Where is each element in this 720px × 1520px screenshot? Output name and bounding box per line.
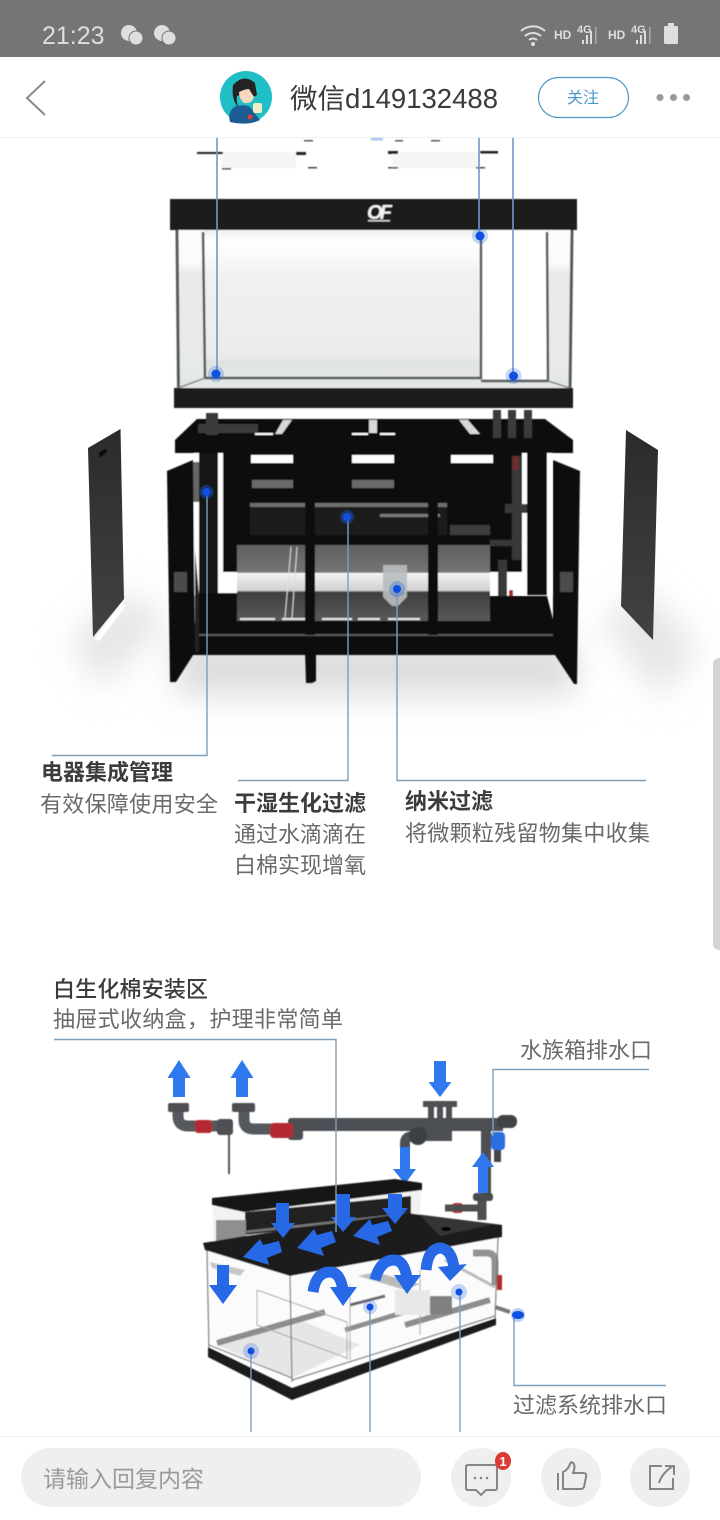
callout lines: upper tank bbox=[208, 138, 522, 384]
callout: white cotton area: 抽屉式收纳盒，护理非常简单 bbox=[53, 1007, 343, 1032]
plumbing on top bbox=[198, 410, 532, 438]
nano filter cup bbox=[383, 565, 407, 606]
floor shadow bbox=[70, 590, 700, 700]
internal pipes bbox=[217, 1296, 490, 1343]
descending pipe bbox=[405, 1127, 486, 1220]
callout: nano filtration: 将微颗粒残留物集中收集 bbox=[405, 821, 650, 846]
base bbox=[208, 1318, 496, 1400]
left side door bbox=[88, 429, 124, 637]
cabinet bbox=[167, 410, 580, 684]
callout: wet dry filtration bbox=[234, 510, 366, 878]
glass body bbox=[207, 1237, 498, 1382]
icon: comment button bbox=[451, 1448, 511, 1507]
callout: white cotton area: 白生化棉安装区 bbox=[53, 977, 208, 1002]
username: 微信d149132488 bbox=[290, 83, 498, 114]
icon: back arrow bbox=[27, 81, 45, 115]
glass bbox=[178, 230, 204, 388]
lights at top bbox=[197, 138, 498, 170]
icon: chat notifications bbox=[121, 25, 176, 45]
clock: 21:23 bbox=[42, 22, 105, 50]
bottom rim bbox=[174, 388, 573, 408]
sump diagram bbox=[203, 1179, 510, 1400]
blue pump bbox=[491, 1132, 505, 1150]
reply input bbox=[21, 1448, 421, 1507]
right door bbox=[553, 460, 580, 684]
callout: filter drain: 过滤系统排水口 bbox=[513, 1393, 667, 1418]
callout: nano filtration: 纳米过滤 bbox=[405, 789, 493, 814]
lid bbox=[203, 1213, 502, 1276]
callout dot bbox=[208, 366, 224, 382]
left door bbox=[167, 460, 195, 682]
callout: wet dry filtration: 白棉实现增氧 bbox=[234, 853, 366, 878]
scrollbar bbox=[713, 658, 720, 950]
inner compartments bbox=[257, 1270, 420, 1360]
left branch pipes bbox=[178, 1108, 298, 1129]
callout: white cotton area bbox=[53, 977, 343, 1232]
back panel bbox=[194, 453, 552, 595]
red valves bbox=[195, 1120, 463, 1213]
icon: wifi and signal indicators: 4G bbox=[577, 24, 592, 36]
callout: filter drain bbox=[511, 1308, 667, 1418]
callout: wet dry filtration: 通过水滴滴在 bbox=[234, 822, 366, 847]
callout: nano filtration bbox=[389, 581, 650, 846]
curved arrow bodies bbox=[313, 1272, 343, 1292]
icon: wifi and signal indicators: HD bbox=[554, 28, 572, 42]
glass frame bbox=[177, 230, 572, 388]
header bar bbox=[0, 57, 720, 138]
reply input: 请输入回复内容 bbox=[43, 1466, 204, 1492]
logo: OF bbox=[367, 202, 393, 224]
follow button bbox=[538, 78, 628, 118]
cabinet top bbox=[175, 419, 573, 453]
piping assembly bbox=[168, 1101, 517, 1220]
cotton drawer box bbox=[212, 1179, 422, 1247]
down arrows bbox=[271, 1203, 295, 1238]
callout: electrical management bbox=[40, 485, 218, 817]
icon: share button bbox=[630, 1448, 690, 1507]
side pipes bbox=[473, 1253, 495, 1285]
icon: wifi and signal indicators bbox=[521, 23, 678, 46]
icon: wifi and signal indicators: 4G bbox=[631, 24, 646, 36]
display tank bbox=[170, 199, 577, 408]
icon: like button bbox=[541, 1448, 601, 1507]
wet dry box bbox=[250, 503, 490, 544]
posts bbox=[305, 453, 315, 635]
notification badge: 1 bbox=[499, 1454, 507, 1469]
sump bbox=[236, 535, 490, 621]
drain rod bbox=[228, 1133, 230, 1174]
avatar bbox=[220, 71, 272, 124]
front posts bbox=[305, 650, 316, 683]
drawer fronts bbox=[252, 480, 394, 488]
flow arrows above pipes bbox=[168, 1060, 494, 1193]
icon: more menu bbox=[656, 94, 690, 101]
curved arrow heads bbox=[330, 1287, 357, 1306]
callout: tank drain: 水族箱排水口 bbox=[520, 1038, 652, 1063]
callout: electrical management: 有效保障使用安全 bbox=[40, 792, 218, 817]
right side door bbox=[621, 430, 658, 640]
flow arrows in sump bbox=[209, 1194, 467, 1306]
callout: tank drain bbox=[493, 1038, 652, 1136]
main pipe bbox=[298, 1118, 503, 1131]
glass edges bbox=[207, 1237, 498, 1382]
follow button: 关注 bbox=[567, 89, 599, 107]
status bar bbox=[0, 0, 720, 57]
door panels and floor shadow bbox=[70, 429, 700, 700]
baffle trays bbox=[210, 1260, 495, 1315]
callout dot bbox=[506, 368, 522, 384]
left diagonal arrows bbox=[243, 1239, 282, 1265]
callout dot bbox=[472, 228, 488, 244]
callout lines: sump points bbox=[243, 1284, 467, 1432]
flanges bbox=[168, 1101, 457, 1140]
top rim bbox=[170, 199, 577, 230]
vent windows bbox=[251, 455, 493, 463]
floor bbox=[193, 593, 557, 655]
icon: wifi and signal indicators: HD bbox=[608, 28, 626, 42]
bottom toolbar bbox=[0, 1436, 720, 1520]
right plumbing bbox=[490, 456, 527, 626]
callout: wet dry filtration: 干湿生化过滤 bbox=[234, 791, 366, 816]
callout: electrical management: 电器集成管理 bbox=[41, 760, 173, 785]
